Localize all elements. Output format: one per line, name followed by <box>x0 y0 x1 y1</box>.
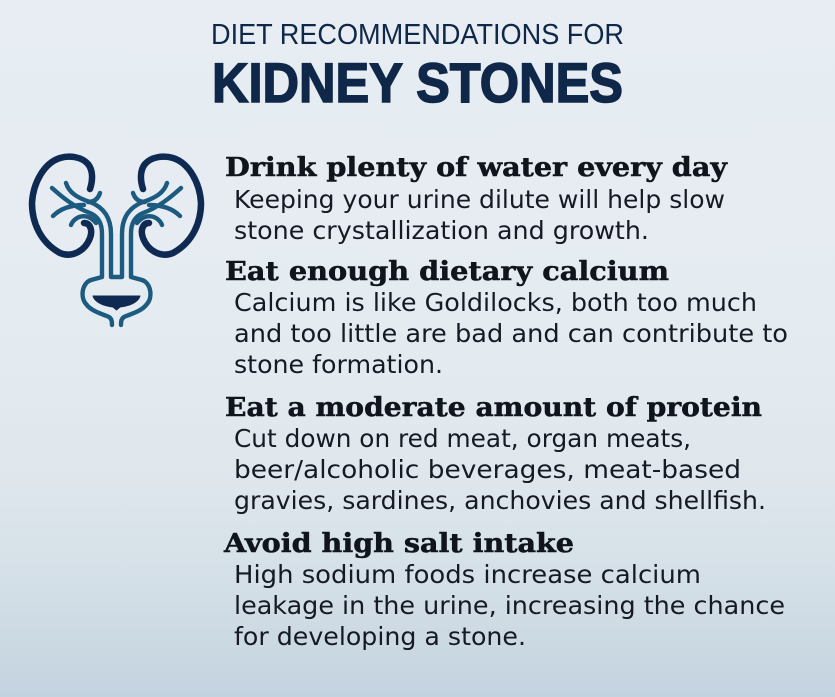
panel: dietary calcium: stone formation. <box>234 350 443 379</box>
icon: kidneys and bladder <box>32 157 201 325</box>
panel: avoid salt <box>223 529 785 651</box>
panel: avoid salt: Avoid high salt intake <box>223 529 574 559</box>
panel: dietary calcium: Calcium is like Goldilocks, both too much <box>234 288 757 317</box>
panel: moderate protein: Eat a moderate amount of protein <box>225 393 762 423</box>
panel: avoid salt: for developing a stone. <box>234 622 526 651</box>
icon: bladder fill <box>93 296 140 310</box>
panel: moderate protein <box>225 393 766 515</box>
panel: moderate protein: Cut down on red meat, organ meats, <box>234 424 691 453</box>
panel: drink water: Keeping your urine dilute will help slow <box>234 185 725 214</box>
panel: drink water: Drink plenty of water every day <box>225 153 728 183</box>
title: KIDNEY STONES <box>212 51 623 114</box>
panel: moderate protein: beer/alcoholic beverages, meat-based <box>234 455 741 484</box>
panel: drink water: stone crystallization and growth. <box>234 216 649 245</box>
panel: dietary calcium: Eat enough dietary calcium <box>225 257 669 287</box>
panel: avoid salt: High sodium foods increase calcium <box>234 560 701 589</box>
panel: dietary calcium <box>225 257 788 379</box>
panel: moderate protein: gravies, sardines, anchovies and shellfish. <box>234 486 766 515</box>
panel: dietary calcium: and too little are bad and can contribute to <box>234 319 788 348</box>
title <box>211 19 624 114</box>
panel: avoid salt: leakage in the urine, increasing the chance <box>234 591 785 620</box>
panel: drink water <box>225 153 728 245</box>
title: DIET RECOMMENDATIONS FOR <box>211 19 624 51</box>
